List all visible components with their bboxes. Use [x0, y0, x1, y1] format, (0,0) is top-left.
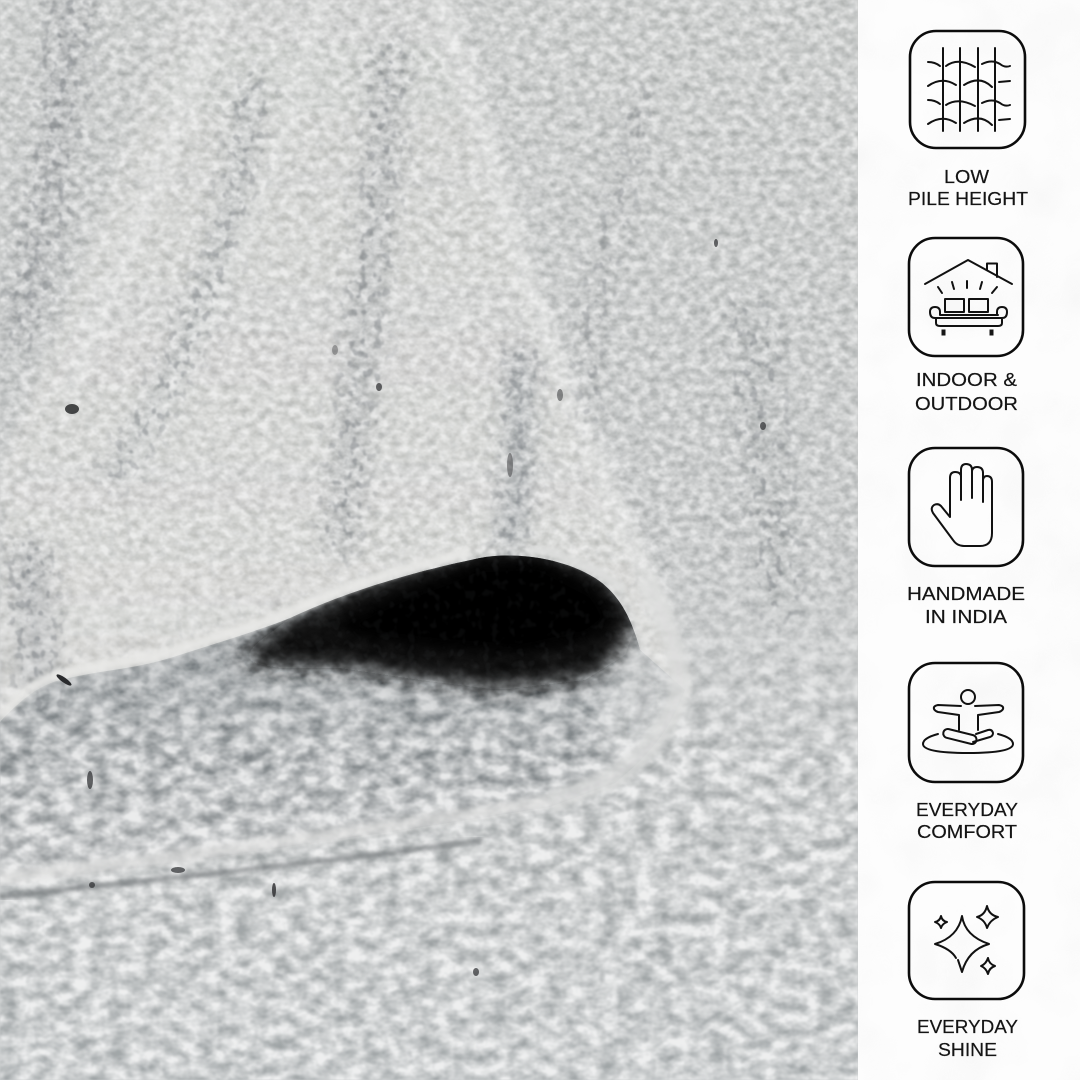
texture: fine wool knit — [0, 0, 858, 726]
icon: house with sofa — [909, 238, 1023, 356]
label: everyday shine: SHINE — [938, 1039, 997, 1060]
texture: chunky wool knit — [0, 568, 858, 1080]
feature: handmade in India — [907, 448, 1025, 627]
label: everyday shine: EVERYDAY — [917, 1016, 1018, 1037]
label: low pile height: LOW — [944, 166, 990, 187]
opening: dark cavity under the fold — [228, 556, 674, 764]
flecks: dark fibres — [55, 239, 766, 976]
feature: low pile height — [908, 31, 1028, 209]
texture: grey flecks in the weave — [0, 0, 858, 1080]
icon: woven pile — [910, 31, 1025, 148]
label: everyday comfort: EVERYDAY — [916, 799, 1018, 820]
icon: open hand — [909, 448, 1023, 566]
photo: folded grey wool rug — [0, 0, 858, 1080]
label: indoor and outdoor: OUTDOOR — [915, 393, 1018, 414]
icon: sparkles — [909, 882, 1024, 999]
fold lip: bright edge of the rug — [0, 552, 470, 716]
label: indoor and outdoor: INDOOR & — [916, 369, 1018, 390]
label: handmade in India: HANDMADE — [907, 583, 1025, 604]
label: handmade in India: IN INDIA — [925, 606, 1008, 627]
icon: seated meditating figure — [909, 663, 1023, 782]
panel: feature sidebar — [858, 0, 1080, 1080]
label: low pile height: PILE HEIGHT — [908, 188, 1028, 209]
feature: indoor and outdoor — [909, 238, 1023, 414]
underside: shaded inner rug surface — [0, 556, 666, 858]
feature: everyday shine — [909, 882, 1024, 1060]
streaks: darker vertical bands on the fold — [20, 0, 780, 700]
highlights: pale vertical bands — [70, 0, 665, 620]
feature: everyday comfort — [909, 663, 1023, 842]
fold: rolled rug top surface — [0, 0, 690, 722]
lower roll: rim of the folded rug — [0, 580, 680, 897]
label: everyday comfort: COMFORT — [917, 821, 1017, 842]
